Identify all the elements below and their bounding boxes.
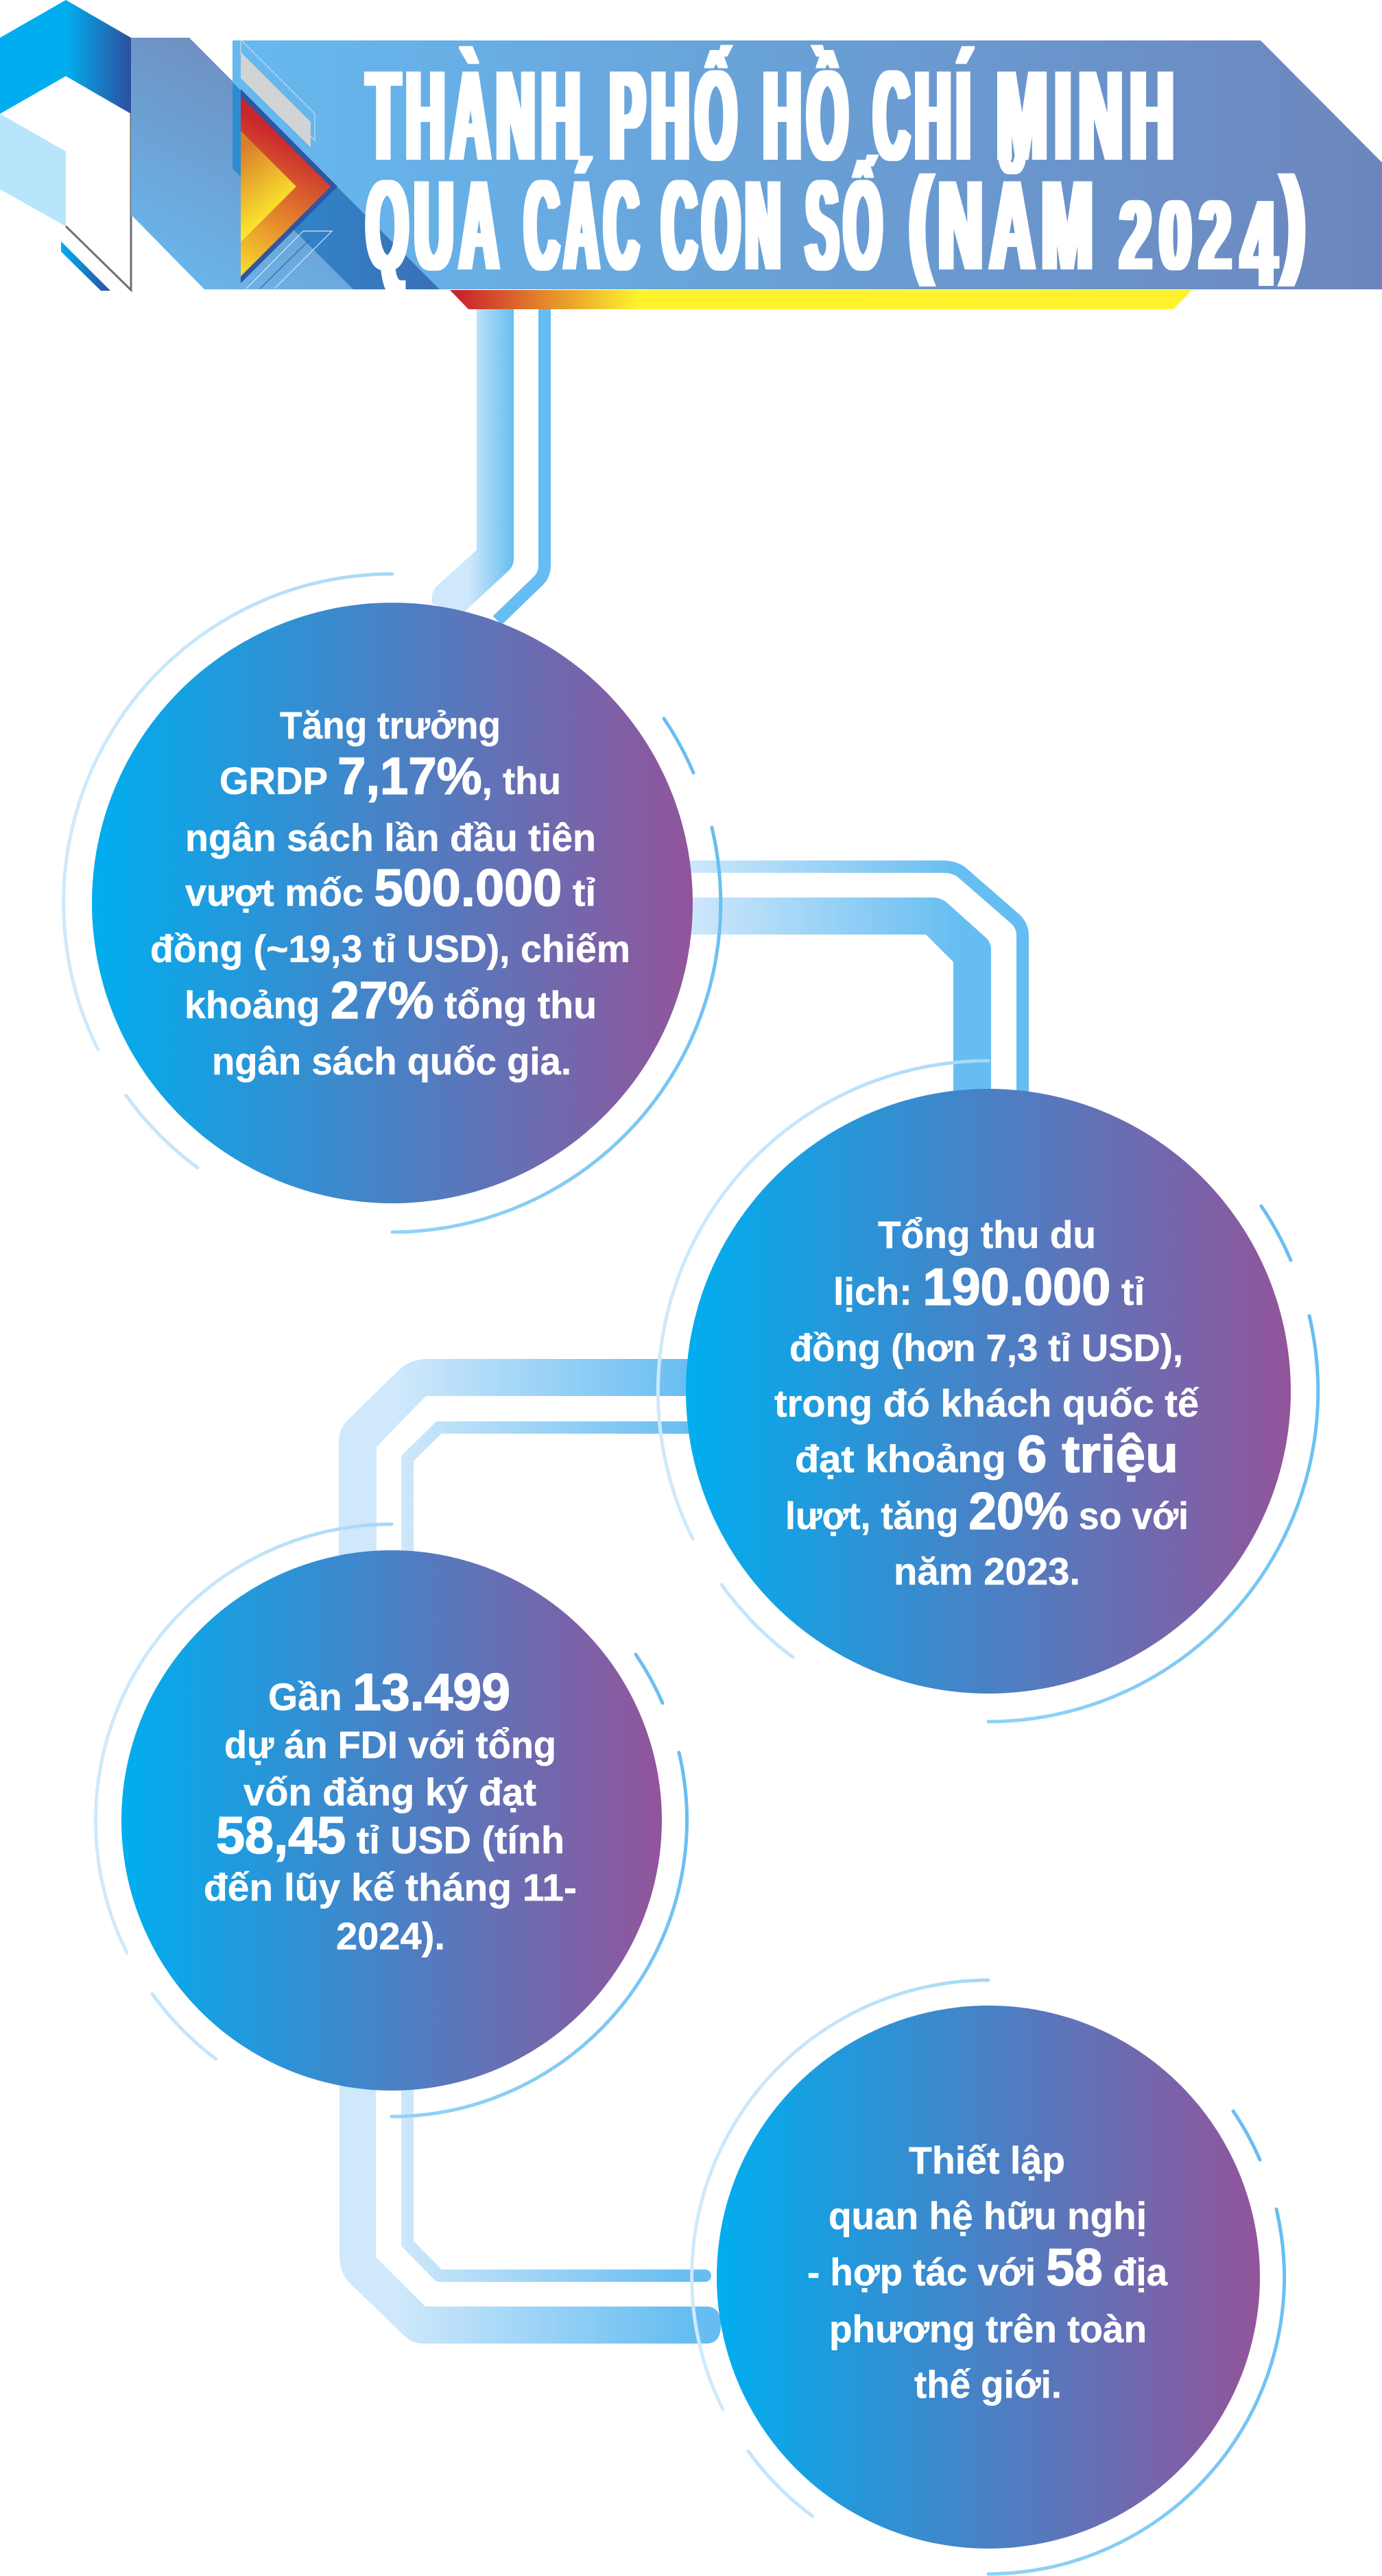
circle 4 text: Thiết lập	[909, 2139, 1065, 2182]
circle 1 text: ngân sách quốc gia.	[212, 1039, 571, 1083]
title: CON	[662, 154, 786, 297]
circle 2 text: năm 2023.	[894, 1550, 1080, 1593]
circle 4 text: - hợp tác với 58 địa	[807, 2239, 1168, 2297]
panel: circle 4 friendship relations	[692, 1980, 1284, 2574]
circle 3 text: đến lũy kế tháng 11-	[204, 1866, 577, 1909]
icon: geometric logo	[0, 0, 131, 291]
title: 4	[1241, 175, 1276, 313]
banner main panel	[233, 40, 1382, 289]
circle 2 text: Tổng thu du	[878, 1213, 1096, 1256]
title: 202	[1120, 180, 1239, 291]
circle 4 text: phương trên toàn	[829, 2307, 1147, 2350]
circle 2 text: lịch: 190.000 tỉ	[833, 1258, 1145, 1316]
circle 1 text: Tăng trưởng	[280, 703, 501, 747]
circle 2 text: đạt khoảng 6 triệu	[795, 1425, 1178, 1484]
circle 1 text: khoảng 27% tổng thu	[184, 972, 597, 1030]
circle 2 text: lượt, tăng 20% so với	[785, 1482, 1189, 1541]
panel: circle 3 FDI	[95, 1524, 687, 2117]
circle 3 text: Gần 13.499	[268, 1663, 510, 1722]
circle 1 rings	[64, 574, 721, 1232]
title: CHÍ	[874, 44, 976, 187]
title: MINH	[997, 44, 1181, 187]
connector: circle 2 to circle 3	[339, 1359, 713, 1577]
title: )	[1280, 152, 1306, 287]
circle 3 text: dự án FDI với tổng	[224, 1723, 556, 1766]
banner back panel	[131, 38, 440, 289]
circle 4 text: thế giới.	[914, 2363, 1062, 2406]
title: PHỐ	[610, 44, 743, 187]
title: NĂM	[938, 154, 1100, 297]
connector: header to circle 1	[432, 309, 545, 621]
circle 4 disc	[717, 2006, 1260, 2549]
circle 2 text: trong đó khách quốc tế	[774, 1382, 1200, 1425]
circle 1 disc	[92, 603, 693, 1203]
circle 4 text: quan hệ hữu nghị	[829, 2194, 1147, 2237]
circle 2 disc	[686, 1089, 1291, 1694]
title: QUA	[366, 154, 505, 297]
circle 3 text: vốn đăng ký đạt	[243, 1770, 536, 1814]
outlined accent lines	[246, 231, 332, 289]
circle 4 rings	[692, 1980, 1284, 2574]
circle 3 rings	[95, 1524, 687, 2117]
connector: circle 3 to circle 4	[339, 2057, 721, 2344]
circle 2 text	[774, 1213, 1200, 1593]
circle 1 text: ngân sách lần đầu tiên	[185, 816, 596, 859]
circle 3 text: 2024).	[336, 1914, 445, 1958]
title: CÁC	[525, 154, 644, 297]
circle 3 text: 58,45 tỉ USD (tính	[216, 1807, 564, 1865]
circle 1 text: vượt mốc 500.000 tỉ	[185, 859, 596, 917]
title: (	[909, 152, 933, 287]
circle 2 text: đồng (hơn 7,3 tỉ USD),	[789, 1326, 1183, 1369]
circle 2 rings	[658, 1061, 1318, 1722]
chevron arrow	[241, 89, 337, 283]
panel: circle 1 GRDP and budget	[64, 574, 721, 1232]
title: THÀNH	[367, 44, 586, 187]
title: HỒ	[763, 44, 854, 187]
circle 3 disc	[121, 1550, 662, 2091]
header	[0, 0, 1382, 309]
circle 1 text: đồng (~19,3 tỉ USD), chiếm	[150, 927, 630, 970]
panel: circle 2 tourism	[658, 1061, 1318, 1722]
circle 1 text: GRDP 7,17%, thu	[219, 747, 561, 806]
banner dark diagonal band	[233, 82, 440, 289]
circle 3 text	[204, 1663, 577, 1958]
circle 1 text	[150, 703, 630, 1083]
title: SỐ	[806, 154, 887, 297]
title	[366, 44, 1306, 313]
colour bar under banner	[450, 290, 1192, 309]
connector: circle 1 to circle 2	[686, 867, 1023, 1124]
circle 4 text	[807, 2139, 1168, 2406]
grey accent parallelogram	[241, 40, 315, 147]
